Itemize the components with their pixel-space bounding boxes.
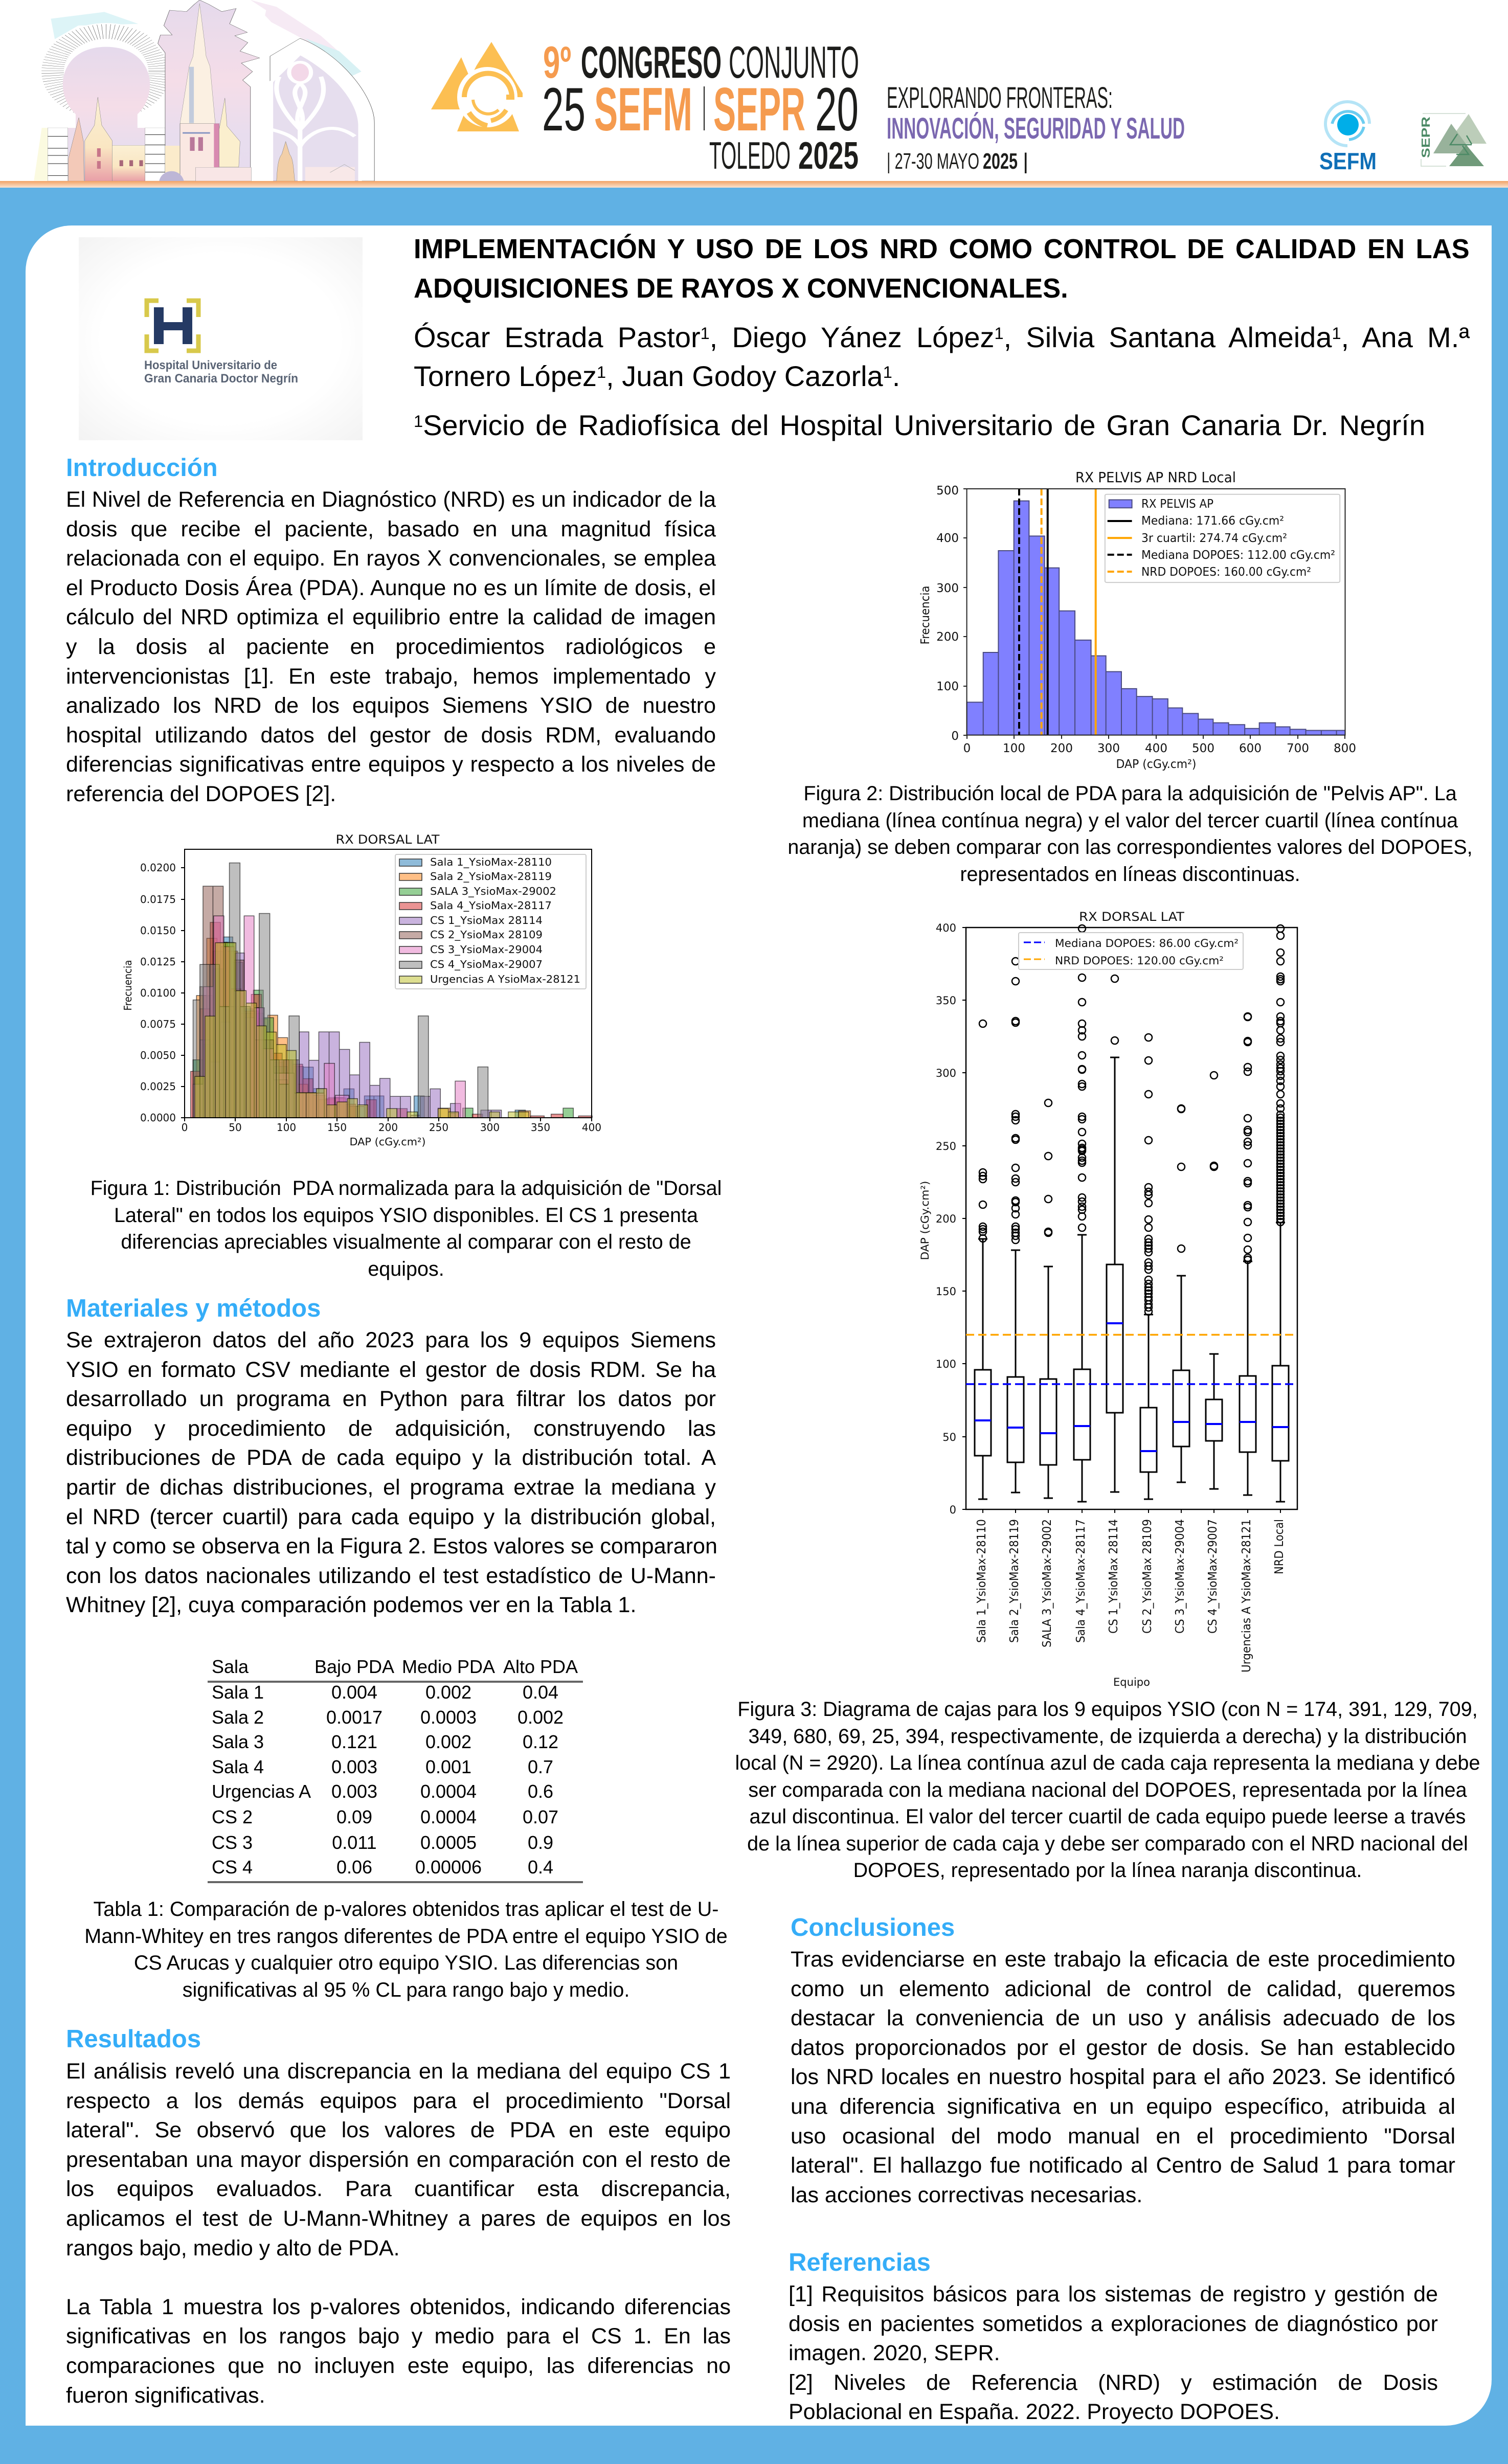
- chart: figure 2 histogram: 400: [936, 532, 959, 545]
- text: resultados: respecto a los demás equipos para el procedimiento "Dorsal: [66, 2089, 731, 2113]
- header band: [0, 0, 1508, 188]
- chart: figure 2 histogram: Mediana DOPOES: 112.00 cGy.cm²: [1141, 549, 1335, 562]
- chart: figure 3 box plot: SALA 3_YsioMax-29002: [1041, 1519, 1054, 1647]
- title: [414, 234, 1470, 304]
- chart: figure 3 box plot: NRD Local: [1273, 1519, 1286, 1574]
- chart: figure 2 histogram: NRD DOPOES: 160.00 cGy.cm²: [1141, 566, 1311, 579]
- chart: figure 2 histogram: 0: [951, 730, 959, 743]
- chart: figure 3 box plot: 150: [936, 1285, 956, 1298]
- chart: figure 1 histogram: CS 4_YsioMax-29007: [430, 958, 543, 970]
- chart: figure 1 histogram: CS 3_YsioMax-29004: [430, 943, 543, 956]
- logo: SEPR: SEPR: [1419, 117, 1432, 158]
- caption: figure 3: de la línea superior de cada caja y debe ser comparado con el NRD nacional del: [747, 1833, 1468, 1855]
- chart: figure 1 histogram: Frecuencia: [122, 960, 134, 1010]
- table 1: Bajo PDA: [314, 1656, 394, 1677]
- chart: figure 3 box plot: [919, 910, 1298, 1688]
- title: ADQUISICIONES DE RAYOS X CONVENCIONALES.: [414, 273, 1068, 304]
- chart: figure 1 histogram: 0.0175: [140, 893, 176, 906]
- caption: table 1: Mann-Whitey en tres rangos diferentes de PDA entre el equipo YSIO de: [84, 1925, 728, 1947]
- chart: figure 2 histogram: [919, 469, 1356, 771]
- chart: figure 2 histogram: 100: [1003, 742, 1025, 755]
- chart: figure 1 histogram: 150: [327, 1121, 347, 1134]
- chart: figure 2 histogram: 400: [1145, 742, 1167, 755]
- caption: figure 1: diferencias apreciables visualmente al comparar con el resto de: [121, 1231, 691, 1253]
- logo: SEPR: [1419, 113, 1487, 167]
- chart: figure 1 histogram: 100: [277, 1121, 296, 1134]
- chart: figure 3 box plot: Sala 1_YsioMax-28110: [975, 1519, 988, 1643]
- chart: figure 3 box plot: Sala 2_YsioMax-28119: [1008, 1519, 1021, 1643]
- table 1: 0.001: [425, 1756, 471, 1777]
- chart: figure 1 histogram: 350: [531, 1121, 550, 1134]
- congress wordmark: [542, 37, 1185, 177]
- chart: figure 1 histogram: 0.0075: [140, 1018, 176, 1030]
- chart: figure 1 histogram: Sala 1_YsioMax-28110: [430, 856, 552, 868]
- chart: figure 1 histogram: [122, 832, 601, 1148]
- chart: figure 2 histogram: 600: [1239, 742, 1262, 755]
- table 1: 0.121: [331, 1731, 377, 1752]
- chart: figure 1 histogram: CS 2_YsioMax 28109: [430, 929, 543, 941]
- table 1: 0.6: [528, 1781, 553, 1802]
- chart: figure 1 histogram: RX DORSAL LAT: [335, 832, 440, 847]
- text: referencias: imagen. 2020, SEPR.: [789, 2341, 1000, 2365]
- table 1: 0.06: [336, 1857, 372, 1878]
- chart: figure 3 box plot: CS 4_YsioMax-29007: [1206, 1519, 1220, 1634]
- caption: figure 3: Figura 3: Diagrama de cajas para los 9 equipos YSIO (con N = 174, 391, 129, 709,: [737, 1698, 1478, 1721]
- chart: figure 3 box plot: CS 2_YsioMax 28109: [1141, 1519, 1154, 1634]
- chart: figure 1 histogram: 0.0025: [140, 1080, 176, 1093]
- text: conclusiones: uso ocasional del modo manual en el procedimiento "Dorsal: [791, 2124, 1455, 2149]
- table 1: Sala 1: [212, 1682, 264, 1703]
- right window: [270, 38, 374, 181]
- text: materiales y métodos: desarrollado un programa en Python para filtrar los datos por: [66, 1387, 716, 1411]
- table 1: 0.002: [425, 1731, 471, 1752]
- table 1: CS 2: [212, 1806, 253, 1827]
- congress wordmark: CONJUNTO: [729, 37, 859, 87]
- table 1: 0.002: [425, 1682, 471, 1703]
- chart: figure 3 box plot: 300: [936, 1067, 956, 1079]
- text: resultados: rangos bajo, medio y alto de PDA.: [66, 2236, 400, 2260]
- chart: figure 2 histogram: 100: [936, 680, 959, 693]
- text: referencias: [2] Niveles de Referencia (NRD) y estimación de Dosis: [789, 2370, 1438, 2395]
- text: resultados: comparaciones que no incluyen este equipo, las diferencias no: [66, 2354, 731, 2378]
- heading: Referencias: Referencias: [789, 2249, 931, 2276]
- table 1: 0.004: [331, 1682, 377, 1703]
- caption: figure 2: Figura 2: Distribución local de PDA para la adquisición de "Pelvis AP". La: [803, 782, 1457, 805]
- text: materiales y métodos: YSIO en formato CSV mediante el gestor de dosis RDM. Se ha: [66, 1358, 716, 1382]
- table 1: 0.9: [528, 1832, 553, 1853]
- table 1: CS 3: [212, 1832, 253, 1853]
- text: conclusiones: como un elemento adicional de control de calidad, queremos: [791, 1977, 1455, 2001]
- table 1: Medio PDA: [402, 1656, 495, 1677]
- text: conclusiones: destacar la conveniencia de un uso y análisis adecuado de los: [791, 2006, 1455, 2030]
- table 1: 0.00006: [415, 1857, 482, 1878]
- chart: figure 1 histogram: CS 1_YsioMax 28114: [430, 914, 543, 926]
- text: resultados: lateral". Se observó que los valores de PDA en este equipo: [66, 2118, 731, 2142]
- chart: figure 1 histogram: 0.0125: [140, 956, 176, 968]
- caption: figure 2: mediana (línea contínua negra) y el valor del tercer cuartil (línea contínua: [802, 809, 1458, 831]
- chart: figure 1 histogram: 0.0150: [140, 924, 176, 937]
- text: materiales y métodos: equipo y procedimiento de adquisición, construyendo las: [66, 1416, 716, 1441]
- chart: figure 3 box plot: Equipo: [1113, 1676, 1150, 1688]
- chart: figure 3 box plot: 400: [936, 922, 956, 934]
- table 1: 0.0003: [420, 1707, 477, 1728]
- congress logo: [431, 42, 523, 131]
- caption: figure 3: ser comparada con la mediana nacional del DOPOES, representada por la línea: [748, 1778, 1467, 1801]
- congress wordmark: 2025: [983, 149, 1018, 174]
- caption: figure 3: local (N = 2920). La línea contínua azul de cada caja representa la mediana y debe: [735, 1752, 1480, 1774]
- table 1: Sala 2: [212, 1707, 264, 1728]
- affiliation: 1Servicio de Radiofísica del Hospital Universitario de Gran Canaria Dr. Negrín: [414, 409, 1425, 441]
- text: introducción: relacionada con el equipo. En rayos X convencionales, se emplea: [66, 546, 716, 571]
- text: materiales y métodos: partir de dichas distribuciones, el programa extrae la mediana y: [66, 1475, 716, 1500]
- congress wordmark: TOLEDO: [709, 134, 791, 177]
- table 1: Sala 3: [212, 1731, 264, 1752]
- text: introducción: referencia del DOPOES [2].: [66, 782, 336, 806]
- chart: figure 2 histogram: 3r cuartil: 274.74 cGy.cm²: [1141, 532, 1287, 545]
- chart: figure 3 box plot: 100: [936, 1358, 956, 1370]
- chart: figure 1 histogram: Sala 2_YsioMax-28119: [430, 870, 552, 883]
- chart: figure 2 histogram: RX PELVIS AP NRD Local: [1075, 469, 1236, 486]
- congress wordmark: 2025: [798, 134, 859, 177]
- chart: figure 2 histogram: 200: [1050, 742, 1073, 755]
- text: resultados: [66, 2059, 731, 2408]
- caption: figure 3: 349, 680, 69, 25, 394, respectivamente, de izquierda a derecha) y la distribución: [748, 1725, 1467, 1748]
- table 1: 0.0004: [420, 1781, 477, 1802]
- text: introducción: diferencias significativas entre equipos y respecto a los niveles de: [66, 752, 716, 777]
- hospital logo: Gran Canaria Doctor Negrín: [144, 372, 298, 386]
- caption: figure 1: Lateral" en todos los equipos YSIO disponibles. El CS 1 presenta: [114, 1204, 698, 1226]
- text: resultados: aplicamos el test de U-Mann-Whitney a pares de equipos en los: [66, 2206, 731, 2231]
- chart: figure 1 histogram: 0.0050: [140, 1049, 176, 1061]
- text: referencias: Poblacional en España. 2022. Proyecto DOPOES.: [789, 2400, 1280, 2424]
- table 1: 0.0004: [420, 1806, 477, 1827]
- chart: figure 1 histogram: 0.0100: [140, 987, 176, 999]
- text: introducción: analizado los NRD de los equipos Siemens YSIO de nuestro: [66, 693, 716, 718]
- chart: figure 1 histogram: Urgencias A YsioMax-28121: [430, 973, 580, 985]
- caption: figure 1: [91, 1177, 722, 1280]
- congress wordmark: | 27-30 MAYO: [887, 149, 979, 174]
- chart: figure 3 box plot: DAP (cGy.cm²): [919, 1181, 931, 1260]
- text: conclusiones: lateral". El hallazgo fue notificado al Centro de Salud 1 para tomar: [791, 2153, 1455, 2178]
- chart: figure 2 histogram: DAP (cGy.cm²): [1116, 758, 1197, 771]
- caption: table 1: CS Arucas y cualquier otro equipo YSIO. Las diferencias son: [134, 1952, 678, 1974]
- table 1: 0.0017: [326, 1707, 382, 1728]
- text: introducción: cálculo del NRD optimiza el equilibrio entre la calidad de imagen: [66, 605, 716, 629]
- table 1: Sala: [212, 1656, 249, 1677]
- text: introducción: El Nivel de Referencia en Diagnóstico (NRD) es un indicador de la: [66, 487, 716, 512]
- text: introducción: [66, 487, 716, 806]
- authors: Óscar Estrada Pastor1, Diego Yánez López1, Silvia Santana Almeida1, Ana M.ª: [414, 321, 1470, 353]
- table 1: 0.04: [523, 1682, 558, 1703]
- caption: figure 2: naranja) se deben comparar con las correspondientes valores del DOPOES,: [787, 836, 1473, 858]
- congress wordmark: 25: [542, 75, 586, 144]
- table 1: Sala 4: [212, 1756, 264, 1777]
- caption: table 1: [84, 1898, 728, 2001]
- logo: SEFM: [1319, 100, 1377, 174]
- text: introducción: el Producto Dosis Área (PDA). Aunque no es un límite de dosis, el: [66, 576, 716, 600]
- chart: figure 2 histogram: 300: [936, 582, 959, 595]
- chart: figure 3 box plot: Mediana DOPOES: 86.00 cGy.cm²: [1055, 937, 1239, 950]
- chart: figure 1 histogram: 200: [378, 1121, 398, 1134]
- text: resultados: significativas en los rangos bajo y medio para el CS 1. En las: [66, 2324, 731, 2348]
- text: resultados: El análisis reveló una discrepancia en la mediana del equipo CS 1: [66, 2059, 731, 2084]
- chart: figure 3 box plot: CS 1_YsioMax 28114: [1107, 1519, 1120, 1634]
- hospital logo: [79, 237, 363, 440]
- heading: Resultados: Resultados: [66, 2025, 201, 2053]
- chart: figure 2 histogram: 800: [1334, 742, 1356, 755]
- center niche: [138, 0, 278, 181]
- table 1: 0.07: [523, 1806, 558, 1827]
- chart: figure 1 histogram: 400: [582, 1121, 601, 1134]
- caption: figure 2: representados en líneas discontinuas.: [960, 863, 1300, 886]
- chart: figure 3 box plot: 350: [936, 994, 956, 1007]
- chart: figure 3 box plot: Urgencias A YsioMax-28121: [1240, 1519, 1253, 1672]
- text: materiales y métodos: Se extrajeron datos del año 2023 para los 9 equipos Siemens: [66, 1328, 716, 1352]
- chart: figure 3 box plot: 50: [942, 1431, 956, 1443]
- caption: figure 1: Figura 1: Distribución PDA normalizada para la adquisición de "Dorsal: [91, 1177, 722, 1200]
- caption: table 1: significativas al 95 % CL para rango bajo y medio.: [183, 1979, 629, 2001]
- chart: figure 1 histogram: 0.0200: [140, 862, 176, 874]
- chart: figure 1 histogram: SALA 3_YsioMax-29002: [430, 885, 556, 897]
- text: resultados: fueron significativas.: [66, 2383, 265, 2408]
- chart: figure 1 histogram: Sala 4_YsioMax-28117: [430, 899, 552, 912]
- chart: figure 3 box plot: CS 3_YsioMax-29004: [1174, 1519, 1187, 1634]
- caption: figure 3: DOPOES, representado por la línea naranja discontinua.: [853, 1859, 1362, 1882]
- chart: figure 2 histogram: RX PELVIS AP: [1141, 498, 1213, 511]
- caption: figure 2: [787, 782, 1473, 886]
- chart: figure 2 histogram: 500: [936, 484, 959, 498]
- logo: SEFM: SEFM: [1319, 148, 1377, 174]
- table 1: 0.011: [332, 1832, 377, 1853]
- text: referencias: [789, 2280, 1438, 2427]
- header orange stripe: [0, 181, 1508, 188]
- chart: figure 2 histogram: Mediana: 171.66 cGy.cm²: [1141, 514, 1284, 528]
- table 1: Alto PDA: [503, 1656, 578, 1677]
- authors: [414, 321, 1470, 392]
- heading: Conclusiones: Conclusiones: [791, 1914, 955, 1941]
- text: introducción: intervencionistas [1]. En este trabajo, hemos implementado y: [66, 664, 716, 689]
- chart: figure 1 histogram: 250: [429, 1121, 448, 1134]
- text: introducción: y la dosis al paciente en procedimientos radiológicos e: [66, 635, 716, 659]
- chart: figure 2 histogram: 300: [1097, 742, 1120, 755]
- table 1: 0.003: [331, 1756, 377, 1777]
- caption: figure 3: azul discontinua. El valor del tercer cuartil de cada equipo puede leerse a través: [750, 1805, 1466, 1828]
- chart: figure 2 histogram: Frecuencia: [919, 586, 932, 644]
- table 1: 0.003: [331, 1781, 377, 1802]
- chart: figure 1 histogram: DAP (cGy.cm²): [350, 1136, 425, 1148]
- table 1: 0.09: [336, 1806, 372, 1827]
- chart: figure 3 box plot: Sala 4_YsioMax-28117: [1074, 1519, 1088, 1643]
- caption: figure 3: [735, 1698, 1480, 1882]
- chart: figure 3 box plot: 0: [950, 1504, 956, 1516]
- text: materiales y métodos: tal y como se observa en la Figura 2. Estos valores se compararon: [66, 1534, 717, 1558]
- text: conclusiones: Tras evidenciarse en este trabajo la eficacia de este procedimiento: [791, 1947, 1455, 1972]
- text: introducción: hospital utilizando datos del gestor de dosis RDM, evaluando: [66, 723, 716, 748]
- heading: Materiales y métodos: Materiales y métodos: [66, 1295, 321, 1322]
- table 1: 0.7: [528, 1756, 553, 1777]
- table 1: 0.002: [517, 1707, 564, 1728]
- authors: Tornero López1, Juan Godoy Cazorla1.: [414, 360, 900, 392]
- chart: figure 1 histogram: 0.0000: [140, 1112, 176, 1124]
- text: materiales y métodos: distribuciones de PDA de cada equipo y la distribución total. A: [66, 1445, 716, 1470]
- text: referencias: dosis en pacientes sometidos a exploraciones de diagnóstico por: [789, 2312, 1438, 2336]
- text: conclusiones: una diferencia significativa en un equipo específico, atribuida al: [791, 2094, 1455, 2119]
- text: referencias: [1] Requisitos básicos para los sistemas de registro y gestión de: [789, 2282, 1438, 2307]
- buildings: [165, 146, 181, 181]
- caption: table 1: Tabla 1: Comparación de p-valores obtenidos tras aplicar el test de U-: [94, 1898, 718, 1920]
- text: conclusiones: [791, 1945, 1455, 2210]
- text: introducción: dosis que recibe el paciente, basado en una magnitud física: [66, 517, 716, 541]
- chart: figure 1 histogram: 50: [229, 1121, 242, 1134]
- chart: figure 3 box plot: NRD DOPOES: 120.00 cGy.cm²: [1055, 955, 1224, 967]
- chart: figure 2 histogram: 0: [963, 742, 971, 755]
- congress wordmark: CONGRESO: [581, 37, 722, 87]
- table 1: Urgencias A: [212, 1781, 311, 1802]
- congress wordmark: SEPR: [713, 75, 805, 144]
- chart: figure 1 histogram: 300: [480, 1121, 500, 1134]
- table 1: CS 4: [212, 1857, 253, 1878]
- text: conclusiones: las acciones correctivas necesarias.: [791, 2183, 1142, 2207]
- chart: figure 3 box plot: 200: [936, 1213, 956, 1225]
- illustration: Toledo arches and skyline: [34, 0, 375, 181]
- congress wordmark: 9º: [543, 37, 571, 87]
- text: materiales y métodos: [66, 1328, 717, 1617]
- text: materiales y métodos: Whitney [2], cuya comparación podemos ver en la Tabla 1.: [66, 1593, 636, 1617]
- title: IMPLEMENTACIÓN Y USO DE LOS NRD COMO CONTROL DE CALIDAD EN LAS: [414, 234, 1470, 264]
- heading: Introducción: Introducción: [66, 454, 218, 482]
- caption: figure 1: equipos.: [368, 1258, 444, 1280]
- text: resultados: presentaban una mayor dispersión en comparación con el resto de: [66, 2147, 731, 2172]
- text: materiales y métodos: con los datos nacionales utilizando el test estadístico de U-Mann-: [66, 1564, 716, 1588]
- text: resultados: La Tabla 1 muestra los p-valores obtenidos, indicando diferencias: [66, 2295, 731, 2319]
- left arch: [41, 23, 171, 120]
- text: conclusiones: los NRD locales en nuestro hospital para el año 2023. Se identificó: [791, 2065, 1455, 2089]
- chart: figure 2 histogram: 700: [1287, 742, 1309, 755]
- table 1: 0.0005: [420, 1832, 477, 1853]
- congress wordmark: |: [1023, 149, 1028, 174]
- congress wordmark: SEFM: [594, 75, 692, 144]
- text: conclusiones: datos proporcionados por el gestor de dosis. Se han establecido: [791, 2036, 1455, 2060]
- table 1: [208, 1656, 583, 1883]
- chart: figure 2 histogram: 200: [936, 630, 959, 644]
- congress wordmark: 20: [815, 75, 859, 144]
- chart: figure 3 box plot: 250: [936, 1140, 956, 1152]
- chart: figure 3 box plot: RX DORSAL LAT: [1079, 910, 1184, 924]
- hospital logo: Hospital Universitario de: [144, 358, 277, 372]
- text: resultados: los equipos evaluados. Para cuantificar esta discrepancia,: [66, 2177, 731, 2201]
- chart: figure 1 histogram: 0: [182, 1121, 188, 1134]
- table 1: 0.12: [523, 1731, 558, 1752]
- text: materiales y métodos: el NRD (tercer cuartil) para cada equipo y la distribución global,: [66, 1505, 716, 1529]
- table 1: 0.4: [528, 1857, 553, 1878]
- chart: figure 2 histogram: 500: [1192, 742, 1214, 755]
